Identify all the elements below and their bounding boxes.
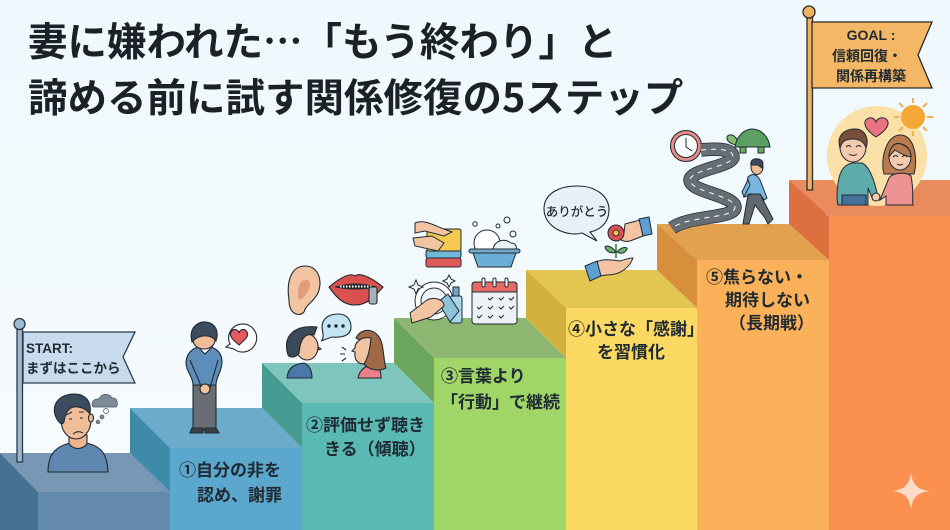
step 5 label: （長期戦） [729, 313, 814, 333]
icon: woman [880, 135, 916, 205]
icon: bowing man [186, 322, 257, 433]
icon: turtle [727, 129, 770, 153]
start flag text: まずはここから [26, 360, 120, 376]
icon: man [837, 129, 878, 205]
icon: zipped lips [329, 275, 383, 305]
step 2 label: きる（傾聴） [324, 440, 426, 459]
step 1 label: ①自分の非を [179, 460, 281, 480]
icon: arigato bubble: ありがとう [546, 204, 608, 219]
icon: heart [865, 118, 888, 137]
icon: wash basin [469, 217, 520, 267]
icon: folded laundry [413, 222, 461, 267]
start flag [14, 318, 135, 462]
step 5 [657, 224, 829, 530]
step 4 label: ④小さな「感謝」 [568, 319, 704, 339]
step 4 [526, 270, 704, 530]
step 2 [262, 363, 434, 530]
step 3 label: 「行動」で継続 [441, 393, 560, 412]
icon: clock [670, 130, 702, 162]
icon: thought cloud [92, 394, 117, 424]
step: goal [789, 180, 950, 530]
icon: happy couple [826, 98, 933, 216]
step 2 label: ②評価せず聴き [306, 416, 425, 435]
title [28, 11, 683, 124]
icon: sparkle [893, 473, 929, 509]
goal flag text: 関係再構築 [836, 68, 906, 84]
icon: walking man [742, 159, 773, 224]
icon: speech bubble [321, 314, 351, 341]
step 4 label: を習慣化 [597, 343, 665, 362]
title: 妻に嫌われた…「もう終わり」と [28, 11, 617, 68]
icon: worried man [48, 394, 117, 472]
goal flag text: 信頼回復・ [832, 48, 902, 64]
goal flag text: GOAL : [847, 27, 895, 43]
start flag text: START: [26, 341, 73, 356]
goal flag [803, 6, 932, 190]
icon: winding road [672, 149, 735, 228]
icon: washing dishes [409, 275, 462, 323]
step 3 [394, 318, 566, 530]
step: start [0, 453, 170, 530]
title: 諦める前に試す関係修復の5ステップ [28, 67, 683, 124]
icon: arigato bubble [544, 186, 609, 241]
step 1 label: 認め、謝罪 [197, 486, 282, 505]
icon: heart bubble [226, 324, 257, 352]
icon: flower and hands [585, 217, 652, 281]
step 5 label: ⑤焦らない・ [706, 268, 808, 287]
icon: two people talking [287, 314, 386, 378]
icon: sun [894, 98, 933, 136]
icon: calendar [472, 278, 517, 324]
icon: ear [288, 266, 320, 314]
step 1 [130, 408, 302, 530]
step 5 label: 期待しない [725, 291, 810, 310]
step 3 label: ③言葉より [441, 367, 526, 386]
